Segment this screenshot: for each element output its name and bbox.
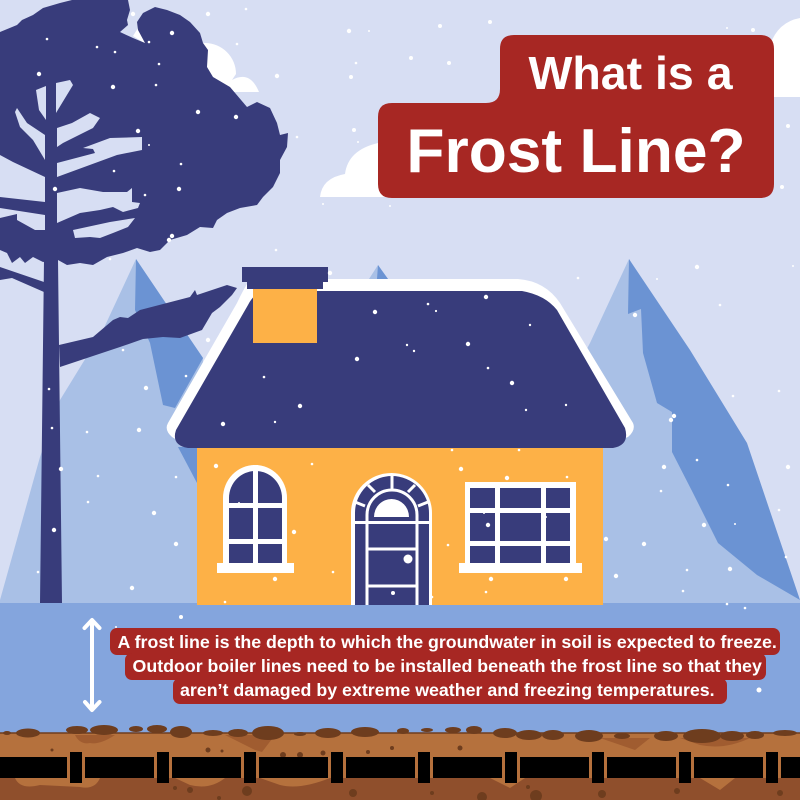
roof outline bbox=[167, 279, 634, 448]
title background bbox=[378, 35, 774, 198]
description text: aren’t damaged by extreme weather and freezing temperatures. bbox=[180, 680, 715, 700]
roof bbox=[175, 291, 626, 448]
wall bbox=[197, 440, 603, 605]
description text: Outdoor boiler lines need to be installed beneath the frost line so that they bbox=[132, 656, 762, 676]
chimney bbox=[253, 289, 317, 343]
left lower branch bbox=[0, 267, 44, 292]
right lower branch bbox=[59, 285, 237, 367]
pipe bbox=[0, 752, 800, 783]
mountains bbox=[0, 259, 800, 603]
text highlight bars bbox=[110, 628, 780, 704]
soil clods bbox=[3, 725, 797, 800]
tree gaps bbox=[0, 80, 142, 238]
description text bbox=[110, 628, 780, 704]
clouds bbox=[133, 18, 800, 197]
title bbox=[378, 35, 774, 198]
title: Frost Line? bbox=[406, 117, 746, 186]
right window bbox=[459, 482, 582, 573]
description text: A frost line is the depth to which the groundwater in soil is expected to freeze. bbox=[118, 632, 777, 652]
title: What is a bbox=[528, 47, 734, 99]
trunk bbox=[40, 80, 62, 603]
chimney cap bbox=[242, 267, 328, 289]
ground water layer bbox=[0, 603, 800, 738]
canopy bbox=[0, 0, 288, 265]
tree bbox=[0, 0, 288, 603]
soil bbox=[0, 725, 800, 800]
depth arrow bbox=[84, 620, 100, 710]
house bbox=[167, 267, 634, 605]
left window bbox=[217, 465, 294, 573]
door bbox=[351, 473, 432, 605]
